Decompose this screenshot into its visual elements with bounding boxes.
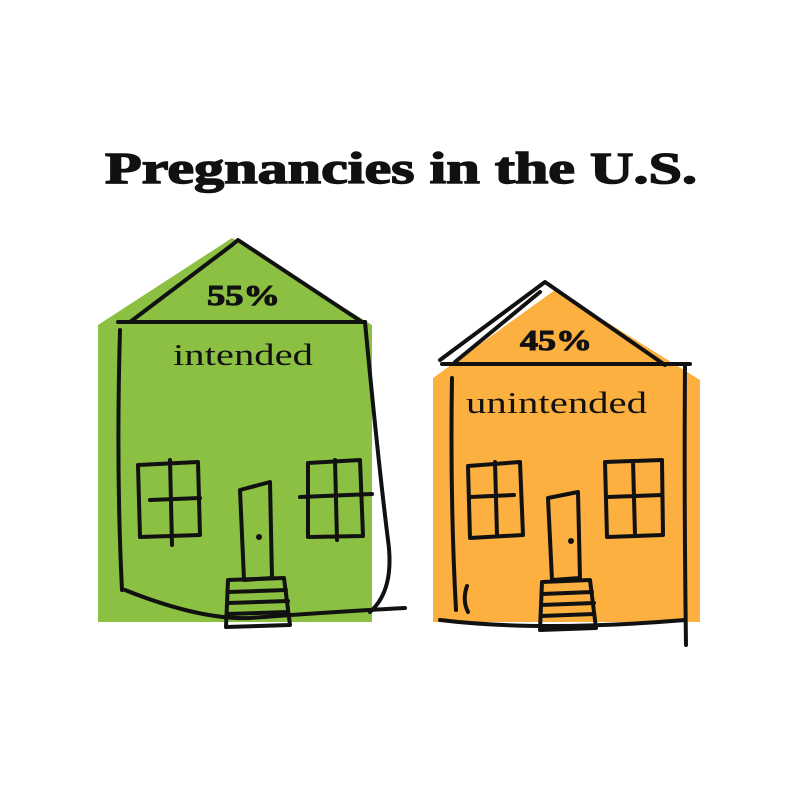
intended label: intended — [173, 337, 314, 372]
door knob — [256, 534, 262, 540]
house outline — [118, 240, 405, 627]
green fill — [98, 238, 372, 622]
unintended label: unintended — [466, 385, 648, 420]
55% label: 55% — [207, 281, 280, 312]
panel: unintended house — [433, 282, 700, 645]
45% label: 45% — [520, 326, 592, 357]
door knob — [568, 538, 574, 544]
orange fill — [433, 290, 700, 622]
house outline — [440, 282, 690, 645]
title: Pregnancies in the U.S. — [105, 144, 697, 193]
panel: intended house — [98, 238, 405, 627]
